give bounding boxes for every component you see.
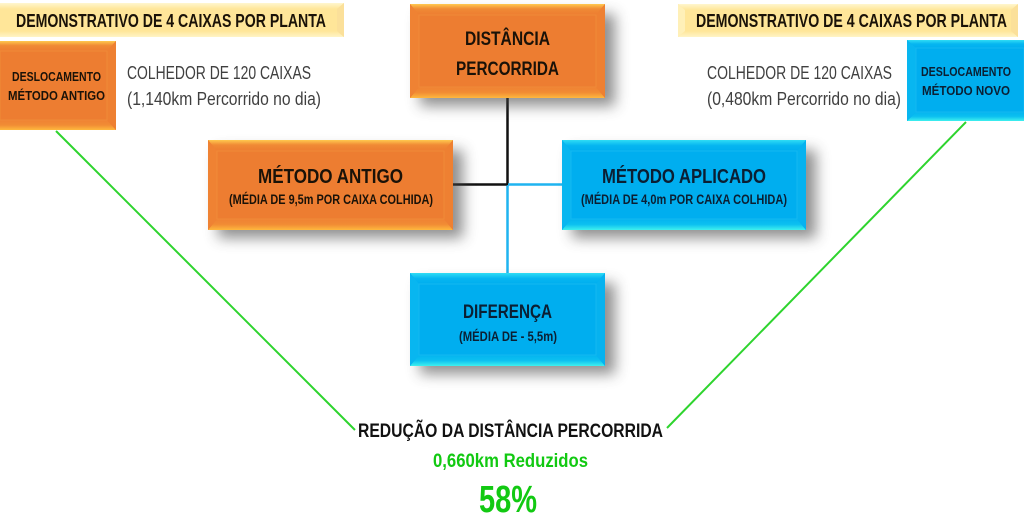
green line left — [56, 131, 355, 430]
heading: redução da distância percorrida: REDUÇÃO DA DISTÂNCIA PERCORRIDA — [358, 420, 663, 442]
connector lines — [453, 98, 562, 273]
box: distância percorrida — [410, 4, 615, 106]
box: diferença: DIFERENÇA — [463, 302, 552, 323]
text: colhedor left: (1,140km Percorrido no dia) — [127, 89, 321, 109]
text: colhedor left: COLHEDOR DE 120 CAIXAS — [127, 63, 311, 83]
box: distância percorrida: PERCORRIDA — [456, 59, 559, 80]
box: deslocamento método novo: MÉTODO NOVO — [922, 83, 1010, 98]
box: método antigo — [208, 140, 463, 238]
banner left — [0, 3, 344, 37]
box: método aplicado: (MÉDIA DE 4,0m POR CAIXA COLHIDA) — [581, 192, 787, 207]
banner left: DEMONSTRATIVO DE 4 CAIXAS POR PLANTA — [16, 11, 326, 31]
text: colhedor right: (0,480km Percorrido no dia) — [707, 89, 901, 109]
box: método aplicado: MÉTODO APLICADO — [602, 165, 766, 188]
box: diferença: (MÉDIA DE - 5,5m) — [459, 329, 557, 344]
text: colhedor right — [707, 63, 901, 109]
text: km reduzidos: 0,660km Reduzidos — [433, 451, 588, 472]
box: método aplicado — [562, 140, 816, 238]
box: método antigo: MÉTODO ANTIGO — [258, 165, 403, 188]
banner right — [678, 4, 1018, 37]
box: deslocamento método antigo — [0, 41, 116, 130]
box: deslocamento método antigo: MÉTODO ANTIGO — [8, 88, 105, 103]
box: método antigo: (MÉDIA DE 9,5m POR CAIXA COLHIDA) — [229, 192, 433, 207]
box: deslocamento método antigo: DESLOCAMENTO — [12, 69, 101, 84]
box: diferença — [410, 273, 615, 374]
text: colhedor right: COLHEDOR DE 120 CAIXAS — [707, 63, 892, 83]
box: deslocamento método novo — [907, 40, 1024, 121]
green line right — [667, 122, 966, 428]
box: distância percorrida: DISTÂNCIA — [465, 28, 550, 50]
text: colhedor left — [127, 63, 321, 109]
